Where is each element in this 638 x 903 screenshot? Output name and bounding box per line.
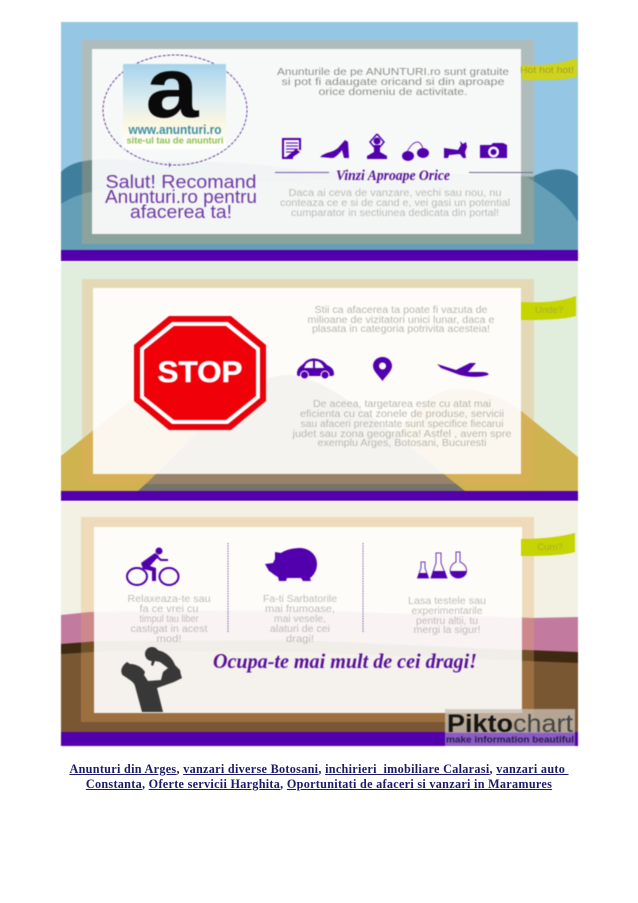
- text: celebrations: dragi!: [286, 634, 314, 645]
- tag: where: [521, 296, 576, 320]
- text: free ads: si pot fi adaugate oricand si din aproape: [282, 76, 505, 88]
- text: targeting: sau afaceri prezentate sunt specifice fiecarui: [300, 419, 504, 430]
- links: regional ads: Anunturi din Arges, vanzari diverse Botosani, inchirieri imobiliare Calarasi, vanzari auto: [69, 762, 565, 776]
- text: celebrations: mai vesele,: [274, 614, 326, 625]
- logo badge: a: [146, 41, 199, 136]
- text: targeting: judet sau zona geografica! Astfel , avem spre: [291, 429, 512, 440]
- text: targeting: [291, 399, 512, 449]
- text: free ads: [277, 66, 509, 98]
- text: relax: fa ce vrei cu: [140, 604, 198, 615]
- logo: Piktochart: make information beautiful: [446, 734, 574, 744]
- icon: stop sign: STOP: [158, 356, 242, 389]
- logo badge: www.anunturi.ro: [128, 123, 222, 137]
- heading: greeting: afacerea ta!: [130, 202, 232, 222]
- tag: hot: Hot hot hot!: [520, 65, 574, 76]
- text: free ads: orice domeniu de activitate.: [318, 86, 468, 98]
- text: visibility: milioane de vizitatori unici lunar, daca e: [308, 315, 495, 326]
- text: targeting: De aceea, targetarea este cu atat mai: [313, 399, 491, 410]
- text: free ads: Anunturile de pe ANUNTURI.ro sunt gratuite: [277, 66, 509, 78]
- panel: where: [61, 262, 578, 501]
- text: sell anything: conteaza ce e si de cand e, vei gasi un potential: [280, 198, 510, 209]
- icons: categories: [283, 134, 507, 161]
- text: celebrations: Fa-ti Sarbatorile: [263, 594, 337, 605]
- text: celebrations: mai frumoase,: [265, 604, 335, 615]
- text: sell anything: [280, 188, 510, 219]
- heading: greeting: [105, 172, 257, 222]
- icon: lab flasks: [418, 552, 467, 578]
- text: experiments: Lasa testele sau: [408, 596, 486, 607]
- text: experiments: pentru altii, tu: [416, 616, 478, 627]
- heading: greeting: Anunturi.ro pentru: [105, 187, 257, 207]
- logo badge: [103, 41, 247, 167]
- text: celebrations: [263, 594, 337, 645]
- logo: Piktochart: Piktochart: [447, 710, 573, 738]
- heading: spend more time: Ocupa-te mai mult de cei dragi!: [213, 649, 477, 673]
- text: relax: mod!: [156, 634, 182, 645]
- text: sell anything: cumparator in sectiunea dedicata din portal!: [291, 208, 499, 219]
- tag: how: [521, 533, 575, 556]
- heading: sell almost anything: Vinzi Aproape Orice: [336, 168, 451, 184]
- text: celebrations: alaturi de cei: [270, 624, 330, 635]
- panel: intro: [61, 22, 578, 261]
- text: experiments: [408, 596, 486, 636]
- text: visibility: plasata in categoria potrivita acesteia!: [312, 324, 490, 335]
- tag: where: Unde?: [535, 305, 563, 316]
- text: targeting: exemplu Arges, Botosani, Bucuresti: [318, 438, 486, 449]
- text: visibility: Stii ca afacerea ta poate fi vazuta de: [314, 305, 488, 316]
- text: relax: Relaxeaza-te sau: [128, 594, 210, 605]
- text: relax: timpul tau liber: [140, 614, 199, 625]
- icon: stop sign: [134, 316, 266, 430]
- text: targeting: eficienta cu cat zonele de produse, servicii: [300, 409, 504, 420]
- text: visibility: [308, 305, 495, 335]
- links: regional ads: Constanta, Oferte servicii Harghita, Oportunitati de afaceri si vanzari in Maramures: [86, 777, 552, 791]
- tag: hot: [520, 58, 577, 80]
- heading: greeting: Salut! Recomand: [106, 172, 256, 192]
- icon: piggy bank: [265, 548, 317, 581]
- text: sell anything: Daca ai ceva de vanzare, vechi sau nou, nu: [288, 188, 502, 199]
- links: regional ads: [69, 762, 568, 791]
- logo badge: site-ul tau de anunturi: [126, 136, 224, 146]
- text: relax: [128, 594, 210, 645]
- icon: cyclist: [127, 548, 178, 585]
- icons: car, pin, plane: [297, 357, 489, 381]
- text: relax: castigat in acest: [130, 624, 208, 635]
- text: experiments: experimentarile: [412, 606, 483, 617]
- text: experiments: mergi la sigur!: [414, 625, 480, 636]
- panel: how: [61, 501, 578, 746]
- tag: how: Cum?: [537, 542, 563, 553]
- icon: father and child: [121, 647, 182, 712]
